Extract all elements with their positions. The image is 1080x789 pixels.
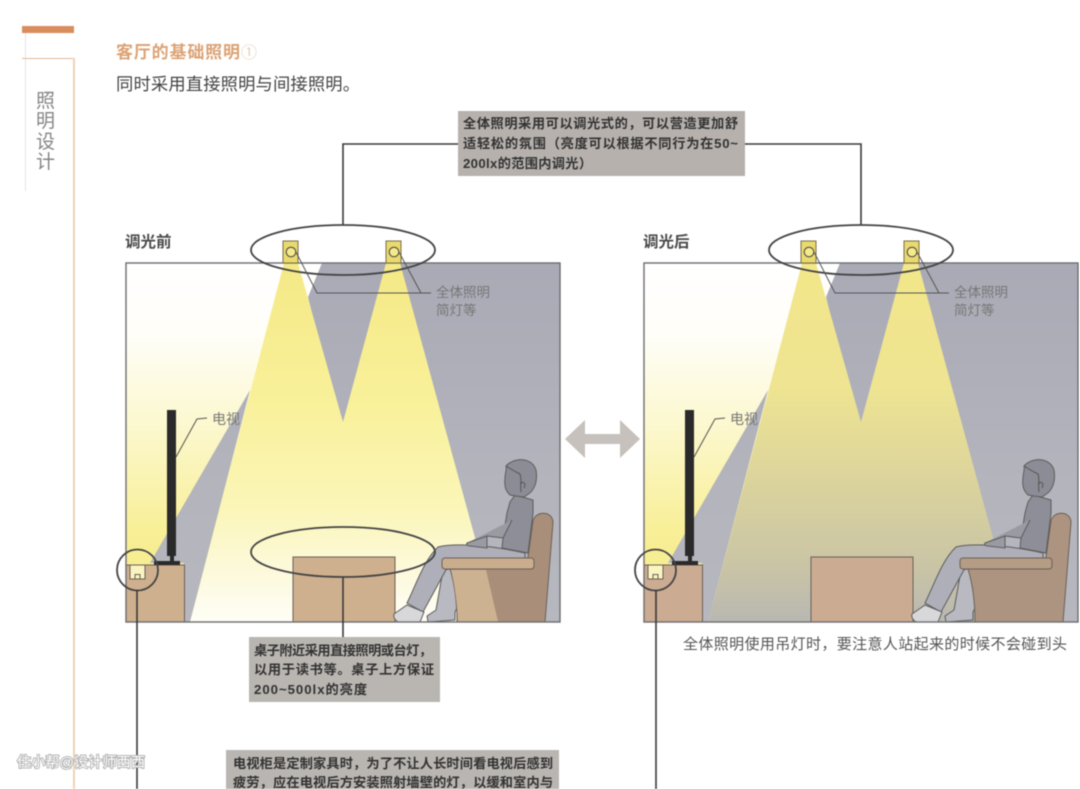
general lighting label and leaders [296,252,490,318]
television [154,410,180,565]
double arrow between panels [565,420,640,458]
watermark: 住小帮@设计师西西 [17,754,145,770]
light beams [190,263,498,622]
general lighting label and leaders: 全体照明 [954,284,1008,300]
TV label and leader [694,411,758,457]
ellipse around ceiling lights [251,225,435,275]
seated person torso [467,460,537,553]
seated person torso [985,460,1055,553]
callout: TV cabinet lighting [226,750,559,789]
callout: dimmable general lighting: 适轻松的氛围（亮度可以根据不同行为在50~ [463,135,738,151]
cabinet light [648,565,663,579]
television [672,410,698,565]
cabinet light [130,565,145,579]
TV label and leader: 电视 [730,411,758,427]
coffee table [293,557,395,622]
ceiling light 1 [283,241,298,263]
shadow on right wall [308,263,560,622]
heading: before dimming: 调光前 [125,232,172,251]
shadow on right wall [826,263,1078,622]
callout: table lighting [249,637,440,702]
shadow behind TV [150,390,250,622]
ceiling light 1 [801,241,816,263]
room outline [126,263,560,622]
room outline [644,263,1078,622]
page side tab [22,26,75,789]
callout: dimmable general lighting [458,111,745,176]
heading: 客厅的基础照明 [116,42,240,62]
TV cabinet [126,565,184,622]
ceiling light 2 [386,241,401,263]
ceiling light 2 [904,241,919,263]
caption: pendant light note: 全体照明使用吊灯时，要注意人站起来的时候不会碰到头 [683,635,1067,653]
sofa [442,513,553,622]
seated person legs [394,545,525,622]
leader: cabinet light to note (left) [136,590,138,789]
leader: table to note [342,577,344,638]
general lighting label and leaders: 简灯等 [954,302,994,318]
TV cabinet [644,565,702,622]
wall background [644,263,1078,622]
callout: TV cabinet lighting: 电视柜是定制家具时，为了不让人长时间看电视后感到 [233,755,553,771]
callout: dimmable general lighting: 200lx的范围内调光） [463,155,592,171]
general lighting label and leaders: 简灯等 [436,302,476,318]
vertical section label: 计 [36,151,55,173]
connector: ceiling lights to note [343,144,861,225]
vertical section label: 明 [36,111,55,132]
ellipse around ceiling lights [769,225,953,275]
circle around cabinet light [117,550,158,590]
TV label and leader: 电视 [212,411,240,427]
heading number: ① [241,44,257,62]
vertical section label: 设 [36,131,55,153]
sofa [960,513,1071,622]
TV label and leader [176,411,240,457]
heading: after dimming: 调光后 [643,233,690,251]
callout: dimmable general lighting: 全体照明采用可以调光式的，可以营造更加舒 [463,115,738,131]
shadow behind TV [668,390,768,622]
wall background [126,263,560,622]
general lighting label and leaders [814,252,1008,318]
callout: table lighting: 200~500lx的亮度 [254,681,367,697]
leader: cabinet light (right) [655,590,657,789]
subtitle: 同时采用直接照明与间接照明。 [116,74,360,94]
general lighting label and leaders: 全体照明 [436,284,490,300]
light beams [708,263,1016,622]
panel: before dimming [117,225,560,622]
seated person legs [912,545,1043,622]
panel: after dimming [635,225,1078,622]
callout: table lighting: 以用于读书等。桌子上方保证 [254,661,434,677]
vertical section label: 照 [36,91,55,112]
circle around cabinet light [635,550,676,590]
vertical section label [36,91,55,173]
callout: table lighting: 桌子附近采用直接照明或台灯， [254,642,432,658]
ellipse above table [251,527,435,577]
coffee table [811,557,913,622]
